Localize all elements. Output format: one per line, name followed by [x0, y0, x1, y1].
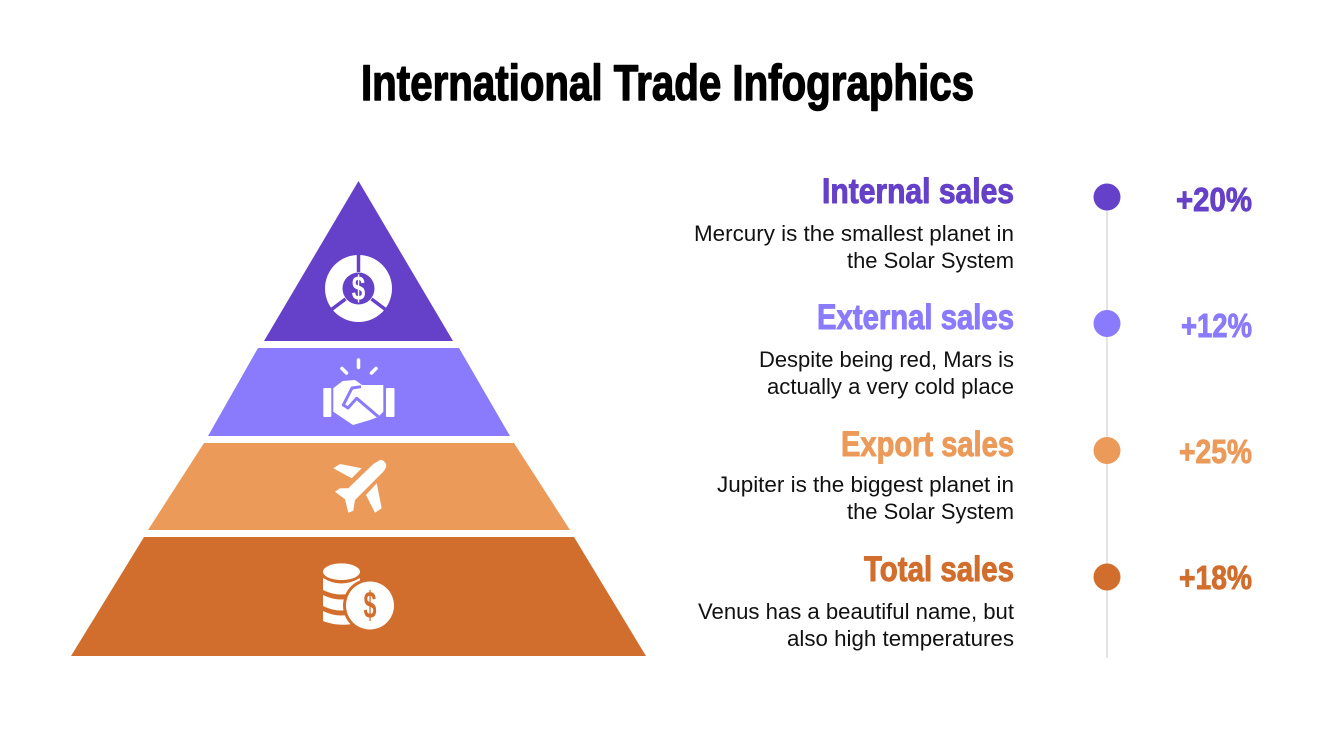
item: internal sales	[694, 172, 1252, 273]
pyramid tier 2: external sales	[208, 348, 510, 436]
marker dot	[1094, 437, 1120, 464]
description: export sales: the Solar System	[847, 499, 1014, 524]
icon: dollar pie chart: $	[352, 270, 365, 308]
description: export sales: Jupiter is the biggest planet in	[717, 472, 1014, 497]
item: export sales	[717, 425, 1252, 524]
item: total sales	[698, 550, 1252, 651]
pyramid	[71, 181, 646, 656]
description: external sales: Despite being red, Mars is	[759, 347, 1014, 372]
description: total sales: also high temperatures	[787, 626, 1014, 651]
value: +20%: +20%	[1176, 181, 1252, 218]
value: +18%: +18%	[1179, 559, 1252, 596]
icon: dollar pie chart	[325, 254, 392, 322]
heading: total sales: Total sales	[864, 550, 1014, 589]
description: external sales: actually a very cold place	[767, 374, 1014, 399]
pyramid tier 4: total sales	[71, 537, 646, 656]
heading: internal sales: Internal sales	[822, 172, 1014, 211]
icon: airplane	[333, 460, 386, 513]
marker dot	[1094, 564, 1120, 590]
description: internal sales	[694, 221, 1014, 273]
item: external sales	[759, 298, 1252, 399]
pyramid tier 3: export sales	[148, 443, 570, 530]
title: International Trade Infographics	[361, 55, 974, 111]
icon: coin stack with dollar: $	[364, 585, 376, 627]
heading: export sales: Export sales	[841, 425, 1014, 464]
description: external sales	[759, 347, 1014, 399]
heading: external sales: External sales	[817, 298, 1014, 337]
icon: handshake	[323, 360, 394, 425]
icon: coin stack with dollar	[323, 563, 397, 632]
description: total sales: Venus has a beautiful name, but	[698, 599, 1015, 624]
marker dot	[1094, 184, 1120, 210]
description: total sales	[698, 599, 1015, 651]
description: internal sales: Mercury is the smallest planet in	[694, 221, 1014, 246]
value: +12%: +12%	[1181, 307, 1252, 344]
value: +25%: +25%	[1179, 433, 1252, 470]
description: internal sales: the Solar System	[847, 248, 1014, 273]
timeline connector line	[1106, 197, 1108, 658]
marker dot	[1094, 310, 1120, 337]
description: export sales	[717, 472, 1014, 524]
pyramid tier 1: internal sales	[264, 181, 453, 341]
